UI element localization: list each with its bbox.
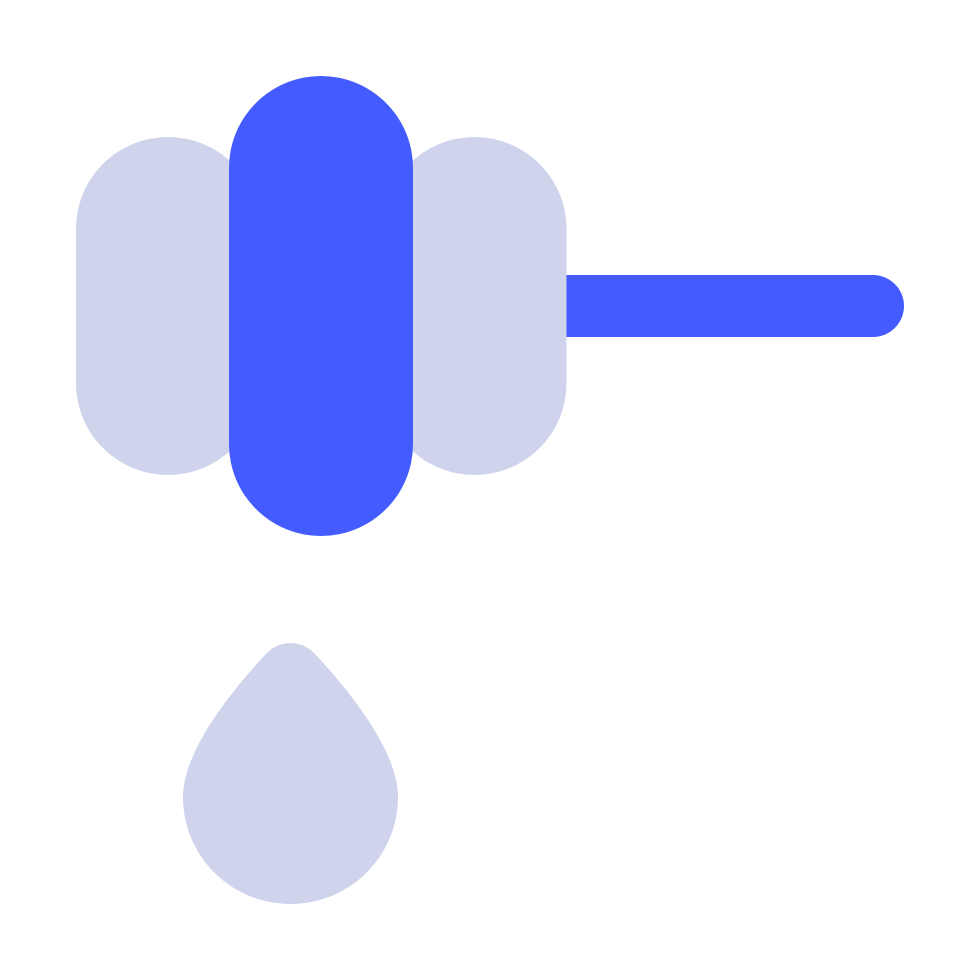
icon: center dipper segment: [229, 76, 413, 536]
icon: honey drop: [183, 643, 398, 904]
icon: left dipper segment: [76, 137, 260, 475]
icon: right dipper segment: [382, 137, 566, 475]
icon: dipper handle: [560, 275, 904, 337]
